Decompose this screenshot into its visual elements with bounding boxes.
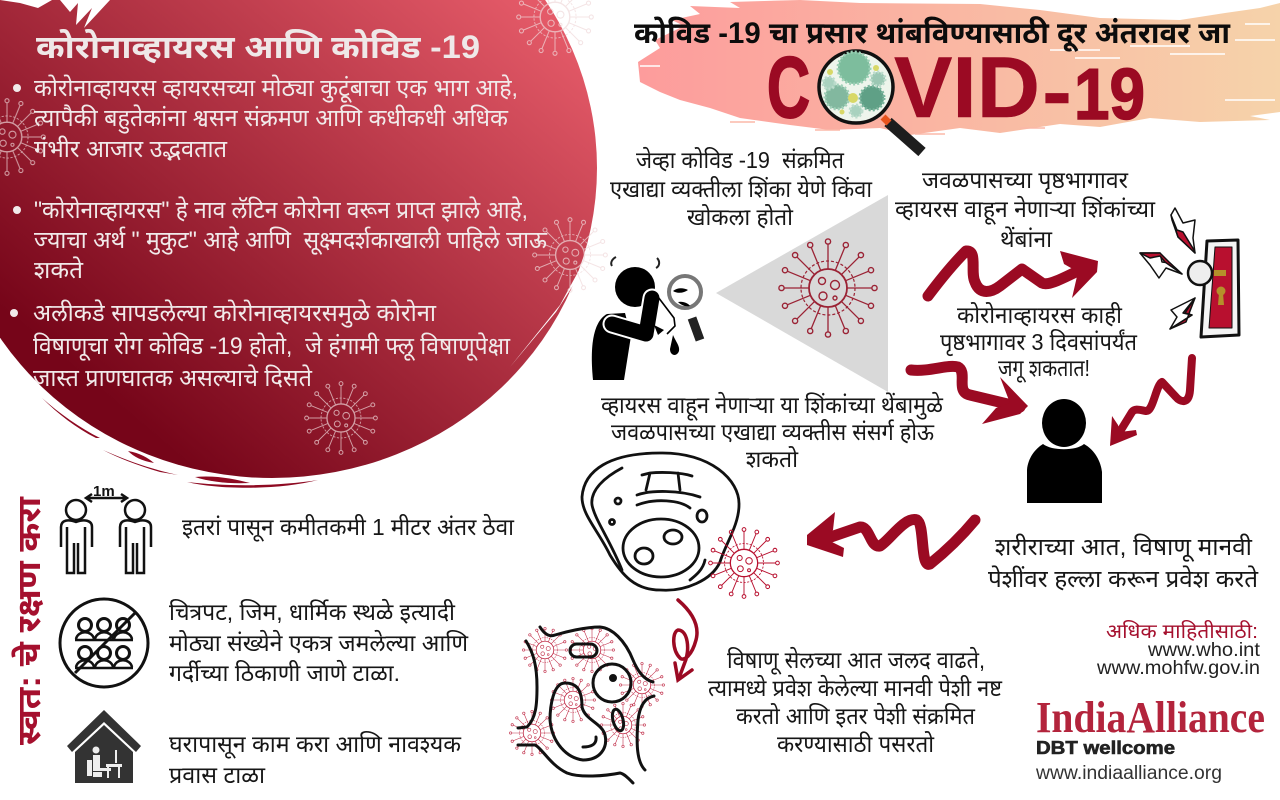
icon: person silhouette: [1027, 399, 1102, 503]
arrow: cone to person: [911, 366, 1028, 424]
text: survive on surfaces: जगू शकतात!: [998, 355, 1090, 383]
wordmark: covid-19: -: [1043, 53, 1071, 133]
text: avoid crowded places: [169, 599, 468, 686]
text: keep 1 metre distance: इतरां पासून कमीतकमी 1 मीटर अंतर ठेवा: [182, 514, 515, 542]
text: virus multiplies: करण्यासाठी पसरतो: [777, 731, 935, 757]
text: virus multiplies: करतो आणि इतर पेशी संक्रमित: [736, 703, 976, 729]
text: survive on surfaces: पृष्ठभागावर 3 दिवसांपर्यंत: [940, 329, 1138, 357]
logo: India Alliance: [1035, 693, 1265, 784]
text: droplets on nearby surfaces: व्हायरस वाहून नेणाऱ्या शिंकांच्या: [895, 196, 1156, 225]
icon: work from home: [67, 710, 141, 783]
bullet list: facts about coronavirus: अलीकडे सापडलेल्या कोरोनाव्हायरसमुळे कोरोना: [33, 299, 437, 328]
bullet list: facts about coronavirus: गंभीर आजार उद्भवतात: [34, 135, 228, 163]
heading: protect yourself, vertical: स्वत: चे रक्षण करा: [11, 496, 47, 745]
icon: sneeze cone with virus: [716, 195, 888, 392]
panel: red circle background: [0, 0, 607, 488]
bullet list: facts about coronavirus: ज्याचा अर्थ " मुकुट" आहे आणि सूक्ष्मदर्शकाखाली पाहिले जाऊ: [34, 226, 548, 255]
text: work from home, avoid travel: प्रवास टाळा: [169, 762, 266, 788]
text: more information links: www.who.int: [1147, 640, 1261, 661]
icon: human cell with virus: [582, 453, 779, 598]
icon: magnifier with viruses: [819, 51, 922, 152]
bullet list: facts about coronavirus: जास्त प्राणघातक असल्याचे दिसते: [33, 364, 313, 392]
text: more information links: www.mohfw.gov.in: [1096, 658, 1260, 679]
logo: India Alliance: www.indiaalliance.org: [1035, 763, 1222, 784]
text: avoid crowded places: मोठ्या संख्येने एकत्र जमलेल्या आणि: [169, 630, 468, 656]
text: virus multiplies: त्यामध्ये प्रवेश केलेल्या मानवी पेशी नष्ट: [708, 675, 1003, 701]
text: inside the body: [988, 533, 1259, 593]
text: droplets infect nearby person: जवळपासच्या एखाद्या व्यक्तीस संसर्ग होऊ: [611, 419, 935, 445]
heading: coronavirus and covid-19: कोरोनाव्हायरस आणि कोविड -19: [36, 29, 480, 65]
bullet list: facts about coronavirus: [10, 74, 548, 392]
text: when an infected person sneezes: [610, 147, 873, 230]
wordmark: covid-19: C: [767, 40, 810, 136]
icon: two people 1m apart: [61, 483, 151, 573]
text: droplets on nearby surfaces: थेंबांना: [1000, 226, 1053, 252]
arrow: person to cell: [807, 512, 975, 564]
text: work from home, avoid travel: घरापासून काम करा आणि नावश्यक: [169, 731, 462, 759]
icon: two people 1m apart: 1m: [93, 483, 115, 500]
text: when an infected person sneezes: खोकला होतो: [687, 204, 794, 230]
bullet list: facts about coronavirus: शकते: [34, 256, 84, 284]
text: virus multiplies: विषाणू सेलच्या आत जलद वाढते,: [727, 647, 985, 675]
wordmark: covid-19: VID: [894, 40, 1040, 136]
text: when an infected person sneezes: जेव्हा कोविड -19 संक्रमित: [636, 147, 845, 173]
text: droplets on nearby surfaces: [895, 167, 1156, 252]
text: droplets infect nearby person: शकतो: [746, 446, 799, 472]
icon: door handle with lightning bolts: [1140, 208, 1239, 337]
text: avoid crowded places: चित्रपट, जिम, धार्मिक स्थळे इत्यादी: [169, 599, 456, 625]
text: avoid crowded places: गर्दीच्या ठिकाणी जाणे टाळा.: [169, 660, 400, 686]
bullet list: facts about coronavirus: "कोरोनाव्हायरस" हे नाव लॅटिन कोरोना वरून प्राप्त झाले आहे,: [34, 196, 528, 224]
text: work from home, avoid travel: [169, 731, 462, 788]
text: survive on surfaces: [940, 302, 1138, 383]
arrow: surface to person: [1110, 358, 1192, 446]
icon: sneezing person with magnifier: [592, 257, 701, 380]
text: inside the body: शरीराच्या आत, विषाणू मानवी: [995, 533, 1253, 562]
text: inside the body: पेशींवर हल्ला करून प्रवेश करते: [988, 565, 1259, 593]
text: virus multiplies: [708, 647, 1003, 757]
wordmark: covid-19: 19: [1074, 55, 1145, 135]
icon: no crowds: [60, 599, 148, 687]
icon: infected cell: [509, 627, 665, 783]
main title: कोविड -19 चा प्रसार थांबविण्यासाठी दूर अंतरावर जा: [634, 16, 1231, 52]
logo: India Alliance: DBT wellcome: [1036, 738, 1175, 758]
brush stroke banner: [638, 0, 1280, 135]
virus decorations on circle: [0, 0, 607, 454]
text: when an infected person sneezes: एखाद्या व्यक्तीला शिंका येणे किंवा: [610, 176, 873, 202]
arrow: to surface: [928, 251, 1098, 298]
text: more information links: अधिक माहितीसाठी:: [1106, 619, 1258, 643]
text: droplets on nearby surfaces: जवळपासच्या पृष्ठभागावर: [922, 167, 1129, 195]
text: droplets infect nearby person: व्हायरस वाहून नेणाऱ्या या शिंकांच्या थेंबामुळे: [601, 392, 943, 421]
wordmark: covid-19: [767, 40, 1145, 136]
bullet list: facts about coronavirus: विषाणूचा रोग कोविड -19 होतो, जे हंगामी फ्लू विषाणूपेक्षा: [33, 332, 511, 361]
bullet list: facts about coronavirus: त्यापैकी बहुतेकांना श्वसन संक्रमण आणि कधीकधी अधिक: [34, 104, 509, 134]
text: survive on surfaces: कोरोनाव्हायरस काही: [957, 302, 1123, 328]
bullet list: facts about coronavirus: कोरोनाव्हायरस व्हायरसच्या मोठ्या कुटूंबाचा एक भाग आहे,: [34, 74, 518, 103]
text: droplets infect nearby person: [601, 392, 943, 472]
text: more information links: [1096, 619, 1261, 679]
arrow: cell to destroyed cell: [674, 600, 697, 680]
